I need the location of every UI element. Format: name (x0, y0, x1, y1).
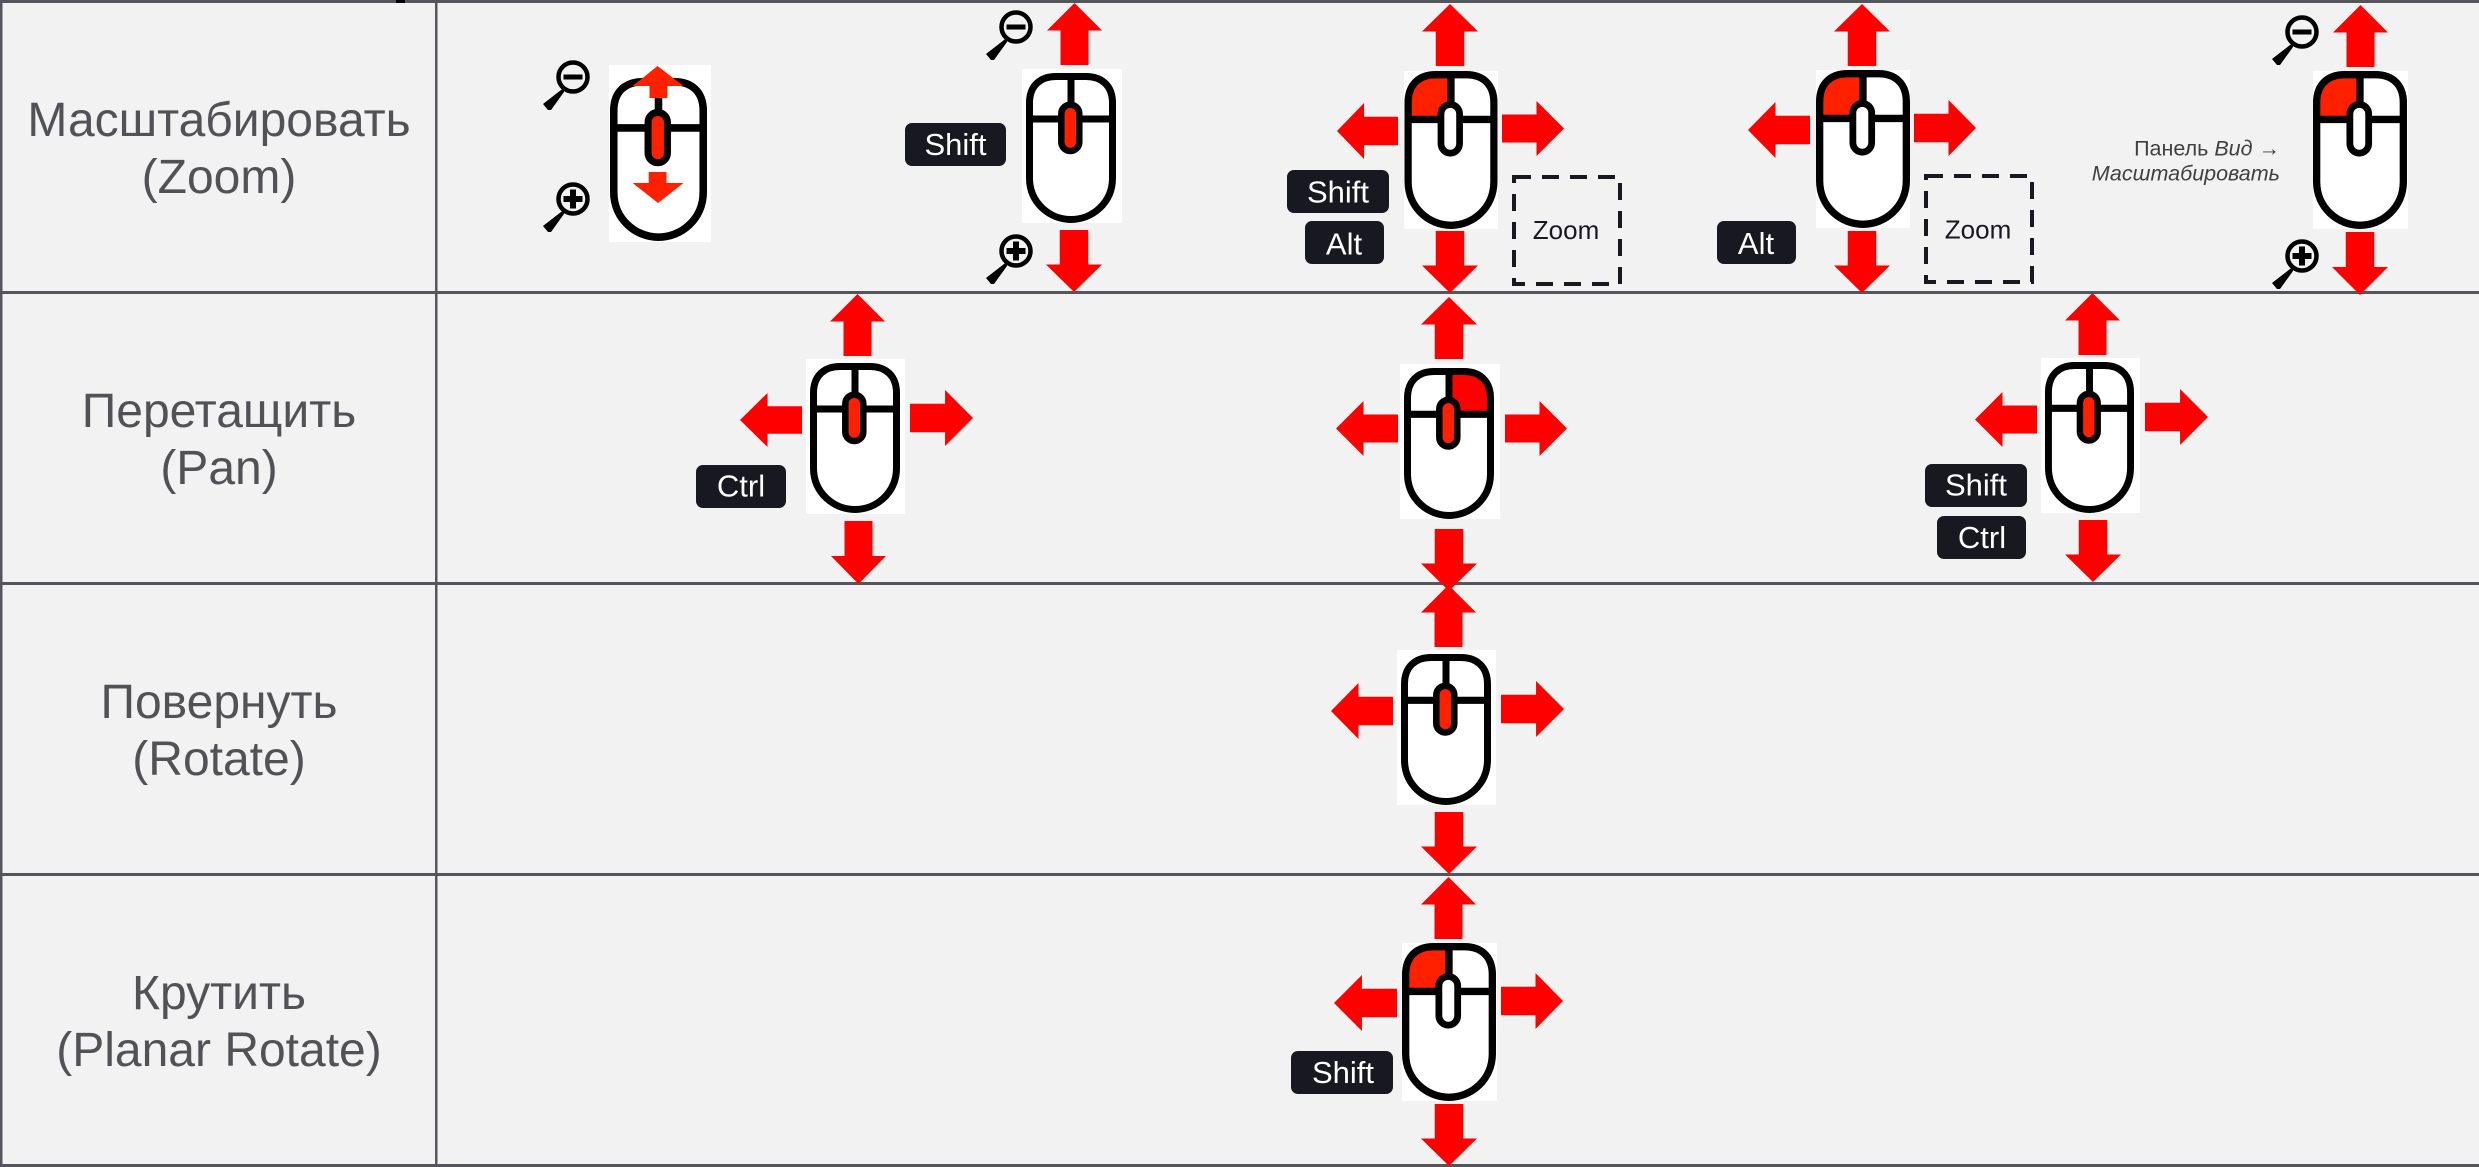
icon: mouse with wheel highlighted (1404, 658, 1488, 801)
icon: mouse with left button highlighted (1408, 75, 1494, 225)
key: Shift: Shift (1312, 1055, 1374, 1090)
arrow: wheel down (633, 172, 684, 203)
zoom option: scroll wheel (543, 62, 711, 242)
arrow: down (1421, 1104, 1477, 1166)
arrow: right (1501, 681, 1564, 737)
rotate option: wheel (1331, 585, 1564, 874)
mouse white backing (2313, 71, 2408, 229)
key: Shift (1291, 1051, 1393, 1094)
arrow: up (830, 294, 885, 356)
zoom window box: Zoom (1533, 215, 1599, 245)
icon: mouse with left button highlighted (2317, 75, 2403, 225)
icon: mouse with wheel highlighted (814, 366, 896, 510)
mouse white backing (1022, 69, 1122, 223)
icon: mouse with wheel highlighted (614, 82, 703, 237)
arrow: left (1748, 102, 1810, 158)
arrow: down (1834, 231, 1890, 293)
icon: mouse with left button highlighted (1820, 74, 1906, 224)
row label: pan: (Pan) (160, 442, 278, 495)
icon: mouse with right button and wheel highlighted (1408, 372, 1490, 515)
arrow: left (1331, 683, 1393, 739)
key: Alt (1717, 221, 1796, 264)
key: Shift: Shift (924, 127, 987, 162)
row label: rotate: Повернуть (100, 676, 338, 729)
mouse white backing (1816, 70, 1910, 228)
arrow: left (1334, 975, 1397, 1031)
arrow: right (1505, 401, 1567, 456)
arrow: right (1502, 101, 1564, 156)
zoom window box (1514, 177, 1620, 284)
mouse white backing (1402, 943, 1497, 1101)
key: Shift (1287, 170, 1389, 213)
mouse white backing (1400, 364, 1500, 519)
key: Shift: Shift (1945, 468, 2007, 503)
arrow: up (1421, 877, 1476, 939)
pan option: right button and wheel (1336, 297, 1567, 591)
key: Shift (1925, 464, 2027, 507)
key: Alt: Alt (1326, 227, 1362, 262)
mouse white backing (806, 359, 905, 514)
key: Alt (1305, 221, 1384, 264)
icon: mouse with wheel highlighted (1030, 76, 1112, 220)
arrow: wheel up (633, 66, 684, 98)
arrow: left (740, 393, 802, 447)
key: Ctrl: Ctrl (717, 469, 765, 504)
key: Alt: Alt (1738, 226, 1774, 261)
icon: zoom in magnifier (2272, 242, 2316, 289)
arrow: up (2065, 293, 2120, 355)
note: view panel path: Панель Вид → (2134, 137, 2280, 161)
key: Shift: Shift (1307, 175, 1369, 210)
arrow: up (1421, 585, 1476, 647)
icon: zoom out magnifier (986, 12, 1030, 60)
row label: planar rotate: (Planar Rotate) (56, 1024, 382, 1077)
arrow: up (1834, 4, 1890, 66)
arrow: down (1422, 231, 1478, 293)
row label: zoom: Масштабировать (27, 94, 411, 147)
arrow: right (1501, 973, 1563, 1029)
row label: zoom: (Zoom) (142, 151, 296, 204)
key: Ctrl: Ctrl (1958, 520, 2006, 555)
zoom window box: Zoom (1945, 215, 2011, 245)
arrow: down (1046, 230, 1102, 292)
arrow: left (1975, 392, 2037, 447)
arrow: right (910, 390, 973, 446)
arrow: down (831, 521, 886, 584)
mouse white backing (2041, 358, 2140, 513)
pan option: ctrl + wheel (696, 294, 973, 584)
arrow: up (1422, 4, 1478, 66)
arrow: down (1421, 812, 1477, 874)
icon: zoom out magnifier (543, 62, 588, 110)
zoom option: alt + left button (1717, 4, 2032, 293)
icon: zoom out magnifier (2272, 18, 2316, 65)
key: Ctrl (1937, 516, 2026, 559)
mouse white backing (1397, 650, 1496, 805)
zoom option: shift + wheel drag (905, 3, 1122, 292)
arrow: left (1337, 103, 1398, 159)
arrow: left (1336, 401, 1398, 456)
row label: pan: Перетащить (82, 385, 356, 438)
icon: mouse with wheel highlighted (2048, 366, 2131, 509)
zoom window box (1926, 176, 2032, 282)
key: Ctrl (696, 465, 786, 508)
arrow: down (2065, 520, 2121, 582)
zoom option: shift + alt + left button (1287, 4, 1620, 293)
arrow: up (2333, 5, 2388, 67)
arrow: down (1421, 529, 1477, 591)
arrow: up (1047, 3, 1102, 65)
row label: planar rotate: Крутить (132, 967, 306, 1020)
pan option: shift + ctrl + wheel (1925, 293, 2208, 582)
icon: zoom in magnifier (986, 236, 1030, 284)
arrow: down (2332, 232, 2388, 295)
row label: rotate: (Rotate) (132, 733, 306, 786)
planar rotate option: shift + left button (1291, 877, 1563, 1166)
icon: mouse with left button highlighted (1406, 947, 1492, 1097)
arrow: up (1421, 297, 1477, 359)
arrow: right (2145, 389, 2208, 445)
zoom option: view panel (2092, 5, 2408, 295)
note: view panel path: Масштабировать (2092, 161, 2280, 185)
icon: zoom in magnifier (543, 184, 588, 232)
mouse white backing (1404, 71, 1498, 229)
mouse white backing (609, 65, 711, 242)
arrow: right (1914, 100, 1976, 156)
key: Shift (905, 123, 1006, 166)
